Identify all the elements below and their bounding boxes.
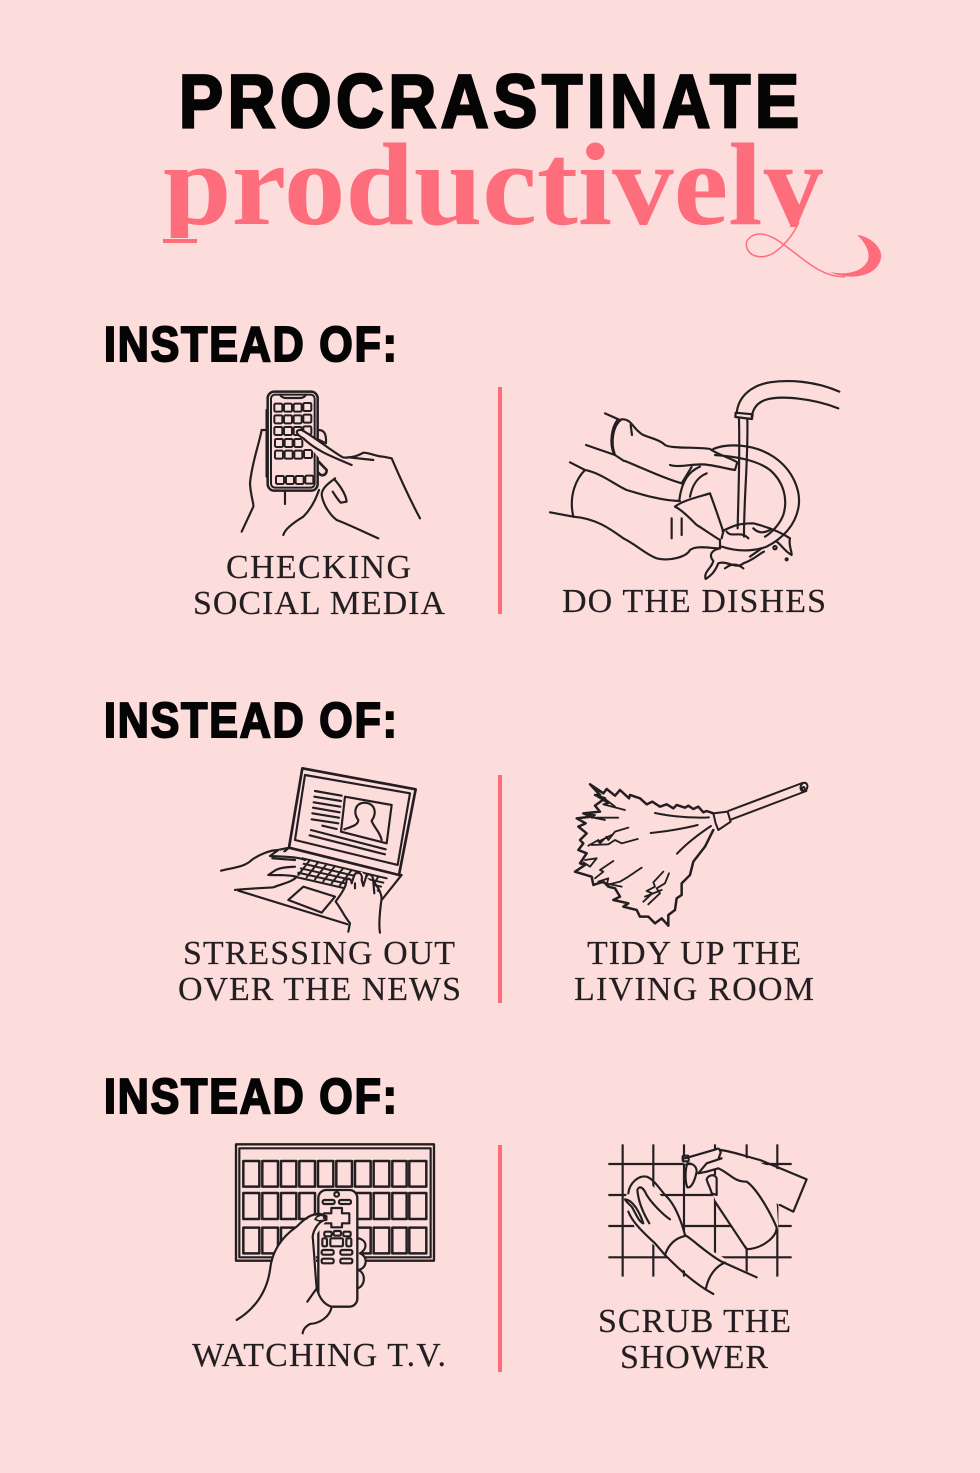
icon: tv remote [236,1144,434,1333]
label: stressing out over the news: OVER THE NEWS [178,971,461,1008]
title: procrastinate: PROCRASTINATE [179,59,799,143]
label: tidy up the living room: LIVING ROOM [574,971,814,1008]
heading: instead of 2: INSTEAD OF: [104,692,397,748]
heading: instead of 1: INSTEAD OF: [104,316,397,372]
label: tidy up the living room: TIDY UP THE [587,935,801,972]
label: watching tv: WATCHING T.V. [192,1337,446,1374]
icon: hands on phone [242,392,420,540]
label: checking social media [193,549,445,622]
divider 2 [498,775,502,1003]
icon: feather duster [575,782,809,926]
icon: washing dishes [550,381,839,579]
icon: scrub shower tiles [608,1144,807,1294]
label: do the dishes: DO THE DISHES [562,583,826,620]
divider 1 [498,387,502,614]
label: scrub the shower: SHOWER [620,1339,768,1376]
label: stressing out over the news: STRESSING OUT [183,935,455,972]
label: tidy up the living room [574,935,814,1008]
label: scrub the shower [598,1303,791,1376]
label: scrub the shower: SCRUB THE [598,1303,791,1340]
divider 3 [498,1145,502,1372]
title: productively: productively [163,119,824,250]
label: checking social media: CHECKING [226,549,411,586]
icon: laptop news [221,768,416,933]
label: stressing out over the news [178,935,461,1008]
heading: instead of 3: INSTEAD OF: [104,1068,397,1124]
label: checking social media: SOCIAL MEDIA [193,585,445,622]
